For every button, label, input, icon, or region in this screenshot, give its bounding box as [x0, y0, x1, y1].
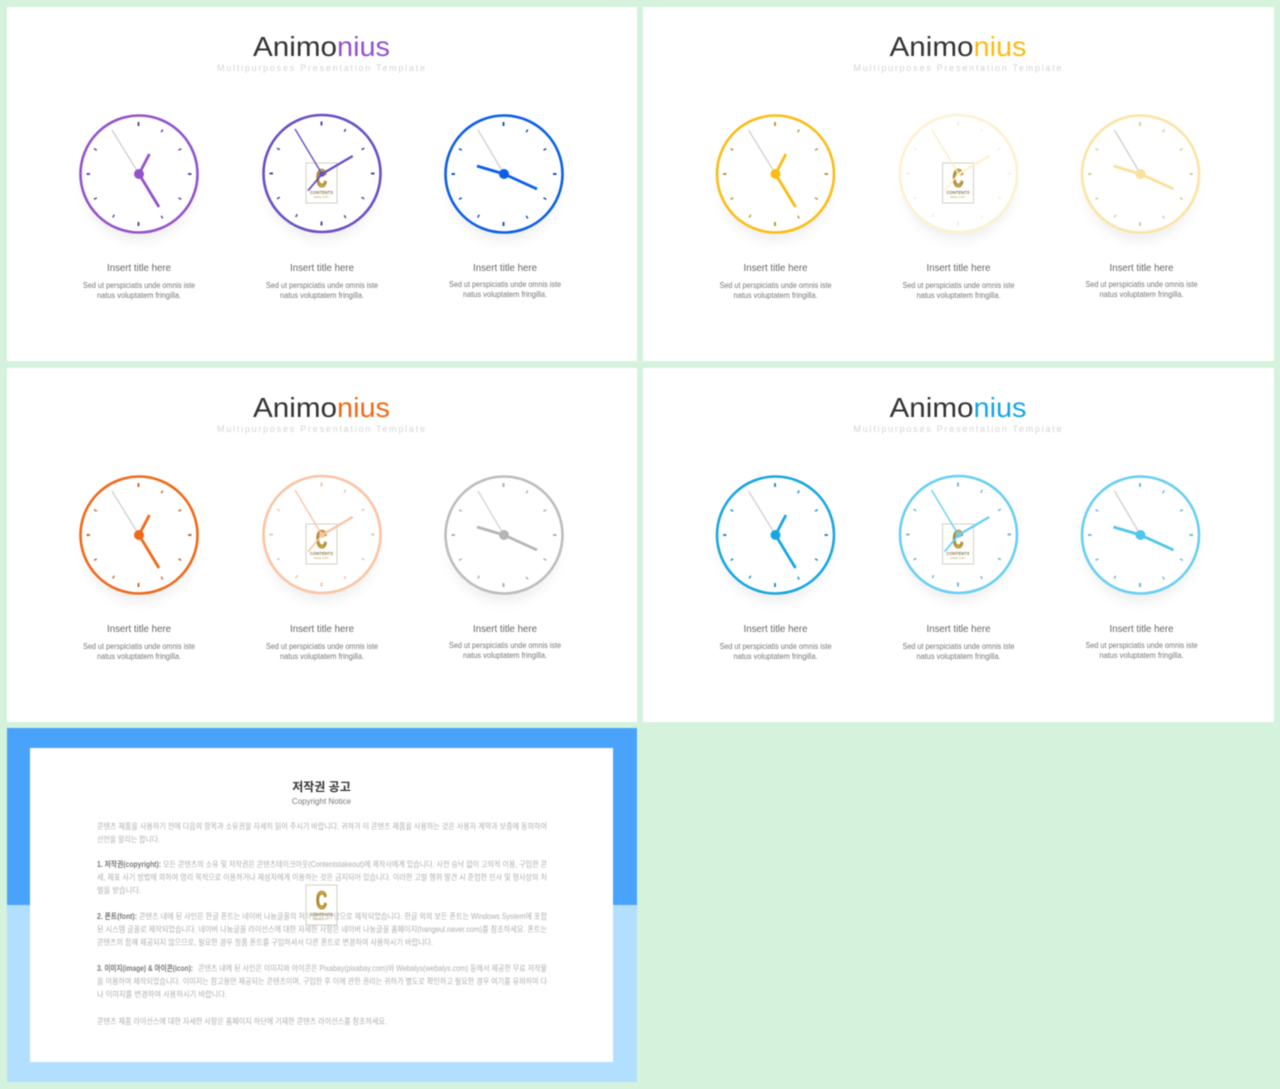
section 2: font: 된 시스템 글꼴로 제작되었습니다. 네이버 나눔글꼴 라이선스에 대한 자세한 사항은 네이버 나눔글꼴 홈페이지(hangeul.naver.com)를 참조하세요. 폰트는	[97, 924, 547, 934]
caption 3: natus voluptatem fringilla.	[463, 290, 547, 299]
caption 1: natus voluptatem fringilla.	[97, 652, 181, 661]
section 2: font: 2. 폰트(font):	[97, 912, 137, 921]
caption 2: natus voluptatem fringilla.	[280, 652, 364, 661]
title: Animo	[890, 392, 974, 423]
intro paragraph	[97, 821, 547, 844]
clock 2	[900, 476, 1017, 600]
title: Animo	[253, 31, 337, 62]
subtitle: Multipurposes Presentation Template	[217, 424, 425, 434]
clock 1	[717, 476, 834, 601]
caption 1: Sed ut perspiciatis unde omnis iste	[720, 642, 832, 651]
clock 1	[80, 116, 198, 240]
caption 2: Insert title here	[926, 624, 991, 635]
intro paragraph: 콘텐츠 제품을 사용하기 전에 다음의 항목과 소유권을 자세히 읽어 주시기 바랍니다. 귀하가 이 콘텐츠 제품을 사용하는 것은 사용자 계약과 보증에 동의하여	[97, 821, 547, 831]
caption 2: Sed ut perspiciatis unde omnis iste	[902, 281, 1015, 290]
clock 2	[900, 115, 1017, 239]
panel: copyright notice	[7, 728, 637, 1082]
caption 3: Insert title here	[1110, 624, 1174, 635]
caption 2: natus voluptatem fringilla.	[916, 652, 1000, 661]
title: nius	[337, 31, 390, 62]
section 2: font: 콘텐츠 내에 된 사인은 한글 폰트는 네이버 나눔글꼴의 저작물을 바탕으로 제작되었습니다. 한글 외의 보든 폰트는 Windows System에 포함	[139, 911, 548, 921]
section 3: image and icon: 을 이용하여 제작되었습니다. 이미지는 참고용만 제공되는 콘텐츠이며, 구입한 후 이에 관한 권리는 귀하가 별도로 확인하고 필요한 경우 여기를 유의하여 다	[97, 976, 548, 986]
clock 2	[264, 476, 380, 600]
subtitle: Multipurposes Presentation Template	[217, 63, 425, 73]
title	[253, 31, 390, 62]
caption 1: Insert title here	[107, 263, 171, 274]
caption 2	[902, 624, 1015, 661]
copyright heading: 저작권 공고	[292, 779, 351, 794]
caption 3: Sed ut perspiciatis unde omnis iste	[449, 641, 561, 650]
caption 1	[720, 624, 832, 661]
caption 1: Insert title here	[107, 624, 171, 635]
section 1: copyright: 벌을 받습니다.	[97, 885, 141, 895]
title: Animo	[253, 392, 337, 423]
intro paragraph: 선언을 알리는 합니다.	[97, 834, 160, 844]
caption 2: Sed ut perspiciatis unde omnis iste	[266, 281, 378, 290]
clock 3	[446, 116, 562, 240]
copyright subheading: Copyright Notice	[292, 797, 352, 806]
section 2: font	[97, 911, 548, 947]
subtitle: Multipurposes Presentation Template	[854, 424, 1062, 434]
caption 3: Sed ut perspiciatis unde omnis iste	[1086, 280, 1198, 289]
section 3: image and icon: 나 이미지를 변경하여 사용하시기 바랍니다.	[97, 989, 227, 999]
section 1: copyright: 1. 저작권(copyright):	[97, 859, 161, 869]
caption 2	[902, 263, 1015, 300]
caption 2: Insert title here	[290, 624, 354, 635]
caption 2	[266, 624, 378, 661]
caption 3: natus voluptatem fringilla.	[1100, 290, 1184, 299]
title	[890, 31, 1026, 62]
caption 1: Sed ut perspiciatis unde omnis iste	[83, 642, 195, 651]
caption 1	[83, 263, 195, 300]
caption 1	[83, 624, 195, 661]
caption 3	[449, 624, 561, 660]
caption 2: Insert title here	[926, 263, 991, 274]
caption 1: natus voluptatem fringilla.	[97, 291, 181, 300]
caption 2: Sed ut perspiciatis unde omnis iste	[266, 642, 378, 651]
clock 1	[80, 476, 198, 601]
section 1: copyright: 세, 제표 사기 방법에 의하여 영리 목적으로 이용하거나 제삼자에게 이용하는 것은 금지되어 있습니다. 이러한 고발 행위 발견 시 준엄한 민사 및 형사상의 처	[97, 872, 547, 882]
caption 3: Insert title here	[473, 624, 537, 635]
caption 3: Sed ut perspiciatis unde omnis iste	[1086, 641, 1198, 650]
caption 1: Insert title here	[744, 263, 808, 274]
caption 1	[720, 263, 832, 300]
title: nius	[974, 392, 1026, 423]
section 3: image and icon: 콘텐츠 내에 된 사인은 이미지와 아이콘은 Pixabay(pixabay.com)와 Webalys(webalys.com) 등에서 제공한 무료 저작물	[198, 963, 547, 973]
caption 3: natus voluptatem fringilla.	[463, 651, 547, 660]
subtitle: Multipurposes Presentation Template	[854, 63, 1062, 73]
caption 3	[1086, 263, 1198, 299]
section 3: image and icon: 3. 이미지(image) & 아이콘(icon):	[97, 963, 193, 973]
panel: cyan clocks	[643, 368, 1274, 722]
caption 1: Sed ut perspiciatis unde omnis iste	[83, 281, 195, 290]
logo watermark	[306, 885, 337, 925]
clock 3	[1082, 476, 1199, 601]
title: Animo	[890, 31, 974, 62]
section 3: image and icon	[97, 963, 548, 999]
caption 1: natus voluptatem fringilla.	[734, 652, 818, 661]
caption 1: Sed ut perspiciatis unde omnis iste	[720, 281, 832, 290]
caption 1: natus voluptatem fringilla.	[734, 291, 818, 300]
caption 3	[449, 263, 561, 299]
title: nius	[337, 392, 390, 423]
title	[890, 392, 1026, 423]
title	[253, 392, 390, 423]
caption 3: Insert title here	[1110, 263, 1174, 274]
section 2: font: 콘텐츠의 함께 제공되지 않으므로, 필요한 경우 정품 폰트를 구입하셔서 다른 폰트로 변경하여 사용하시기 바랍니다.	[97, 937, 433, 947]
caption 3: Sed ut perspiciatis unde omnis iste	[449, 280, 561, 289]
panel: orange and gray clocks	[7, 368, 637, 722]
caption 2: Insert title here	[290, 263, 354, 274]
clock 1	[717, 116, 834, 240]
caption 2	[266, 263, 378, 300]
caption 2: Sed ut perspiciatis unde omnis iste	[902, 642, 1015, 651]
panel: yellow clocks	[643, 7, 1274, 361]
clock 3	[1082, 116, 1199, 240]
caption 2: natus voluptatem fringilla.	[916, 291, 1000, 300]
clock 2	[264, 115, 380, 239]
caption 3: natus voluptatem fringilla.	[1100, 651, 1184, 660]
panel: purple and blue clocks	[7, 7, 637, 361]
section 1: copyright	[97, 859, 547, 895]
caption 2: natus voluptatem fringilla.	[280, 291, 364, 300]
caption 3	[1086, 624, 1198, 660]
section 1: copyright: 모든 콘텐츠의 소유 및 저작권은 콘텐츠테이크아웃(Contentstakeout)에 제작사에게 있습니다. 사전 승낙 없이 고의적 이용, 구입한 콘	[163, 859, 547, 869]
license note: 콘텐츠 제품 라이선스에 대한 자세한 사항은 홈페이지 하단에 기재한 콘텐츠 라이선스를 참조하세요.	[97, 1016, 387, 1026]
caption 3: Insert title here	[473, 263, 537, 274]
title: nius	[974, 31, 1026, 62]
caption 1: Insert title here	[744, 624, 808, 635]
clock 3	[446, 476, 562, 601]
